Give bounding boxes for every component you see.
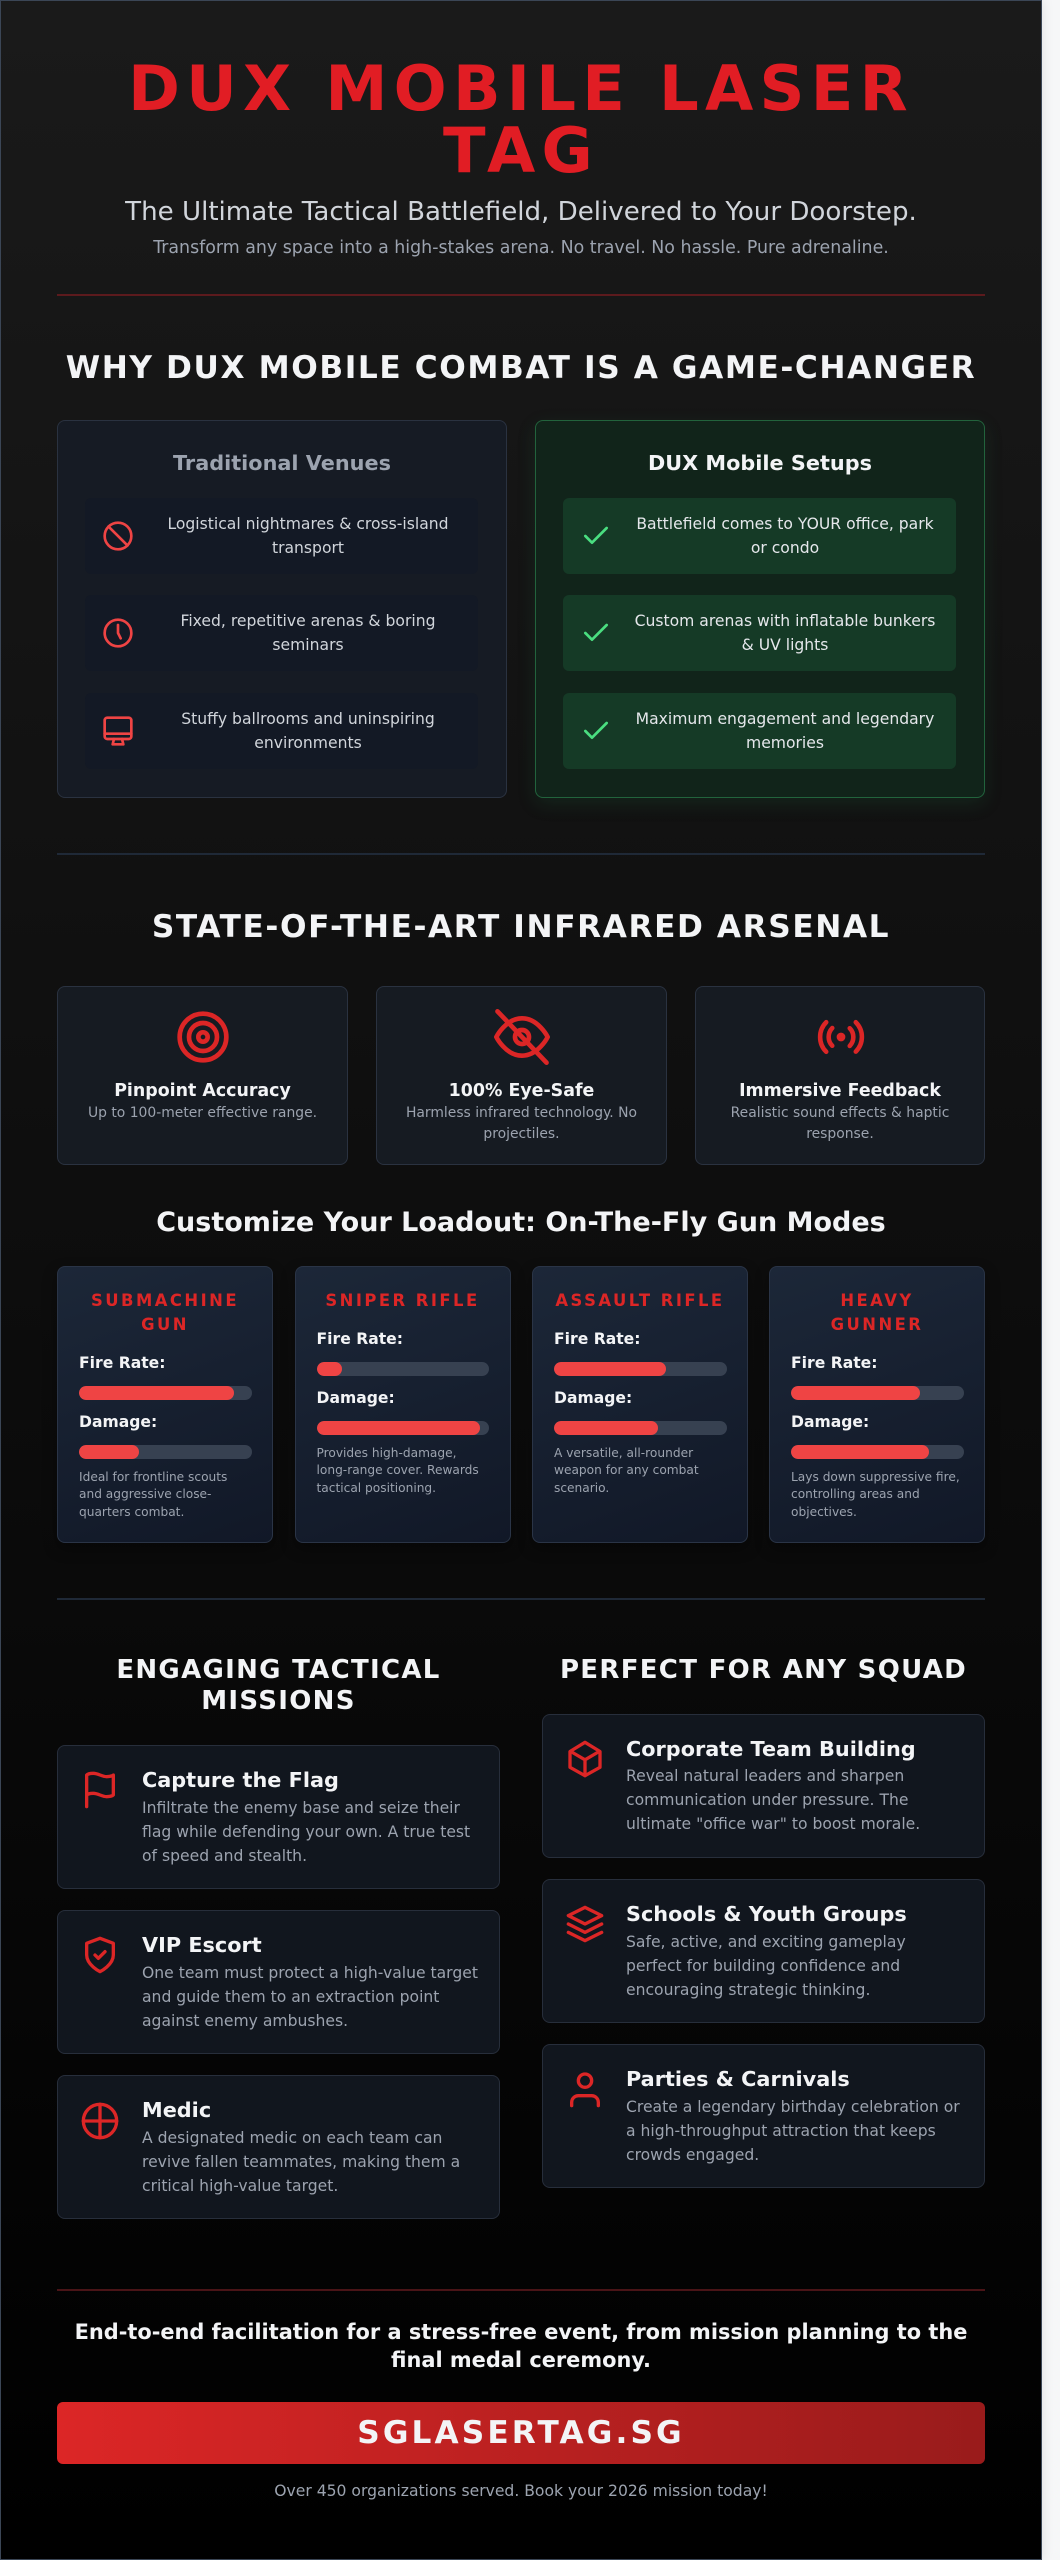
feature card: pinpoint accuracy [57,986,348,1165]
gun card: assault rifle: Damage: [554,1389,632,1407]
bar: fire rate 75% [791,1386,964,1400]
item: battlefield comes to you [563,498,956,574]
gun card: sniper rifle: Fire Rate: [316,1330,403,1348]
audience card: corporate team building: Reveal natural leaders and sharpen [626,1767,904,1785]
gun card: submachine gun: and aggressive close- [79,1487,211,1501]
heading: arsenal: STATE-OF-THE-ART INFRARED ARSENAL [152,909,890,945]
mission card: medic: revive fallen teammates, making them a [142,2153,460,2171]
item: stuffy ballrooms: Stuffy ballrooms and uninspiring [181,710,435,728]
audience card: parties and carnivals [542,2044,985,2188]
item: custom arenas: & UV lights [742,636,828,654]
icon: check [584,624,608,642]
gun card: heavy gunner: GUNNER [831,1315,923,1334]
feature card: eye-safe [376,986,666,1165]
subtitle: The Ultimate Tactical Battlefield, Delivered to Your Doorstep. [125,197,917,227]
feature card: eye-safe: projectiles. [483,1126,560,1142]
footer note: Over 450 organizations served. Book your 2026 mission today! [274,2482,768,2500]
bar: damage 35% [79,1445,252,1459]
audience card: schools and youth: Safe, active, and exciting gameplay [626,1932,906,1950]
audience card: schools and youth [542,1879,985,2023]
gun card: assault rifle: A versatile, all-rounder [554,1446,693,1460]
title: DUX MOBILE LASER [128,52,914,125]
gun card: submachine gun: Damage: [79,1413,157,1431]
audience card: parties and carnivals: Parties & Carnivals [626,2067,850,2091]
icon: broadcast waves [818,1020,864,1054]
feature card: immersive feedback: Immersive Feedback [739,1081,941,1101]
gun card: submachine gun: Fire Rate: [79,1354,166,1372]
icon: flag [85,1772,115,1808]
icon: layers [566,1906,604,1942]
gun card: submachine gun [57,1266,273,1543]
gun card: heavy gunner: HEAVY [840,1291,914,1310]
gun card: heavy gunner: Damage: [791,1413,869,1431]
item: battlefield comes to you: Battlefield comes to YOUR office, park [636,514,934,532]
heading: tactical missions [116,1655,441,1716]
closing statement [75,2320,967,2372]
mission card: VIP escort: VIP Escort [142,1933,262,1957]
item: stuffy ballrooms: environments [254,734,362,752]
mission card: VIP escort [57,1910,500,2054]
item: logistics: transport [272,539,344,557]
item: stuffy ballrooms [85,693,478,769]
feature card: immersive feedback: Realistic sound effects & haptic [731,1104,949,1120]
audience card: parties and carnivals: Create a legendary birthday celebration or [626,2098,960,2116]
audience card: schools and youth: perfect for building confidence and [626,1957,900,1975]
panel heading: traditional venues: Traditional Venues [173,451,391,475]
mission card: medic: A designated medic on each team can [142,2128,442,2146]
call to action button [57,2402,985,2464]
bar: damage 80% [791,1445,964,1459]
audience card: schools and youth: encouraging strategic thinking. [626,1981,870,1999]
item: maximum engagement [563,693,956,769]
item: logistics: Logistical nightmares & cross-island [167,514,449,532]
gun card: sniper rifle: Damage: [316,1389,395,1407]
mission card: VIP escort: and guide them to an extraction point [142,1988,439,2006]
mission card: capture the flag [57,1745,500,1889]
heading: tactical missions: ENGAGING TACTICAL [116,1655,441,1685]
gun card: submachine gun: Ideal for frontline scouts [79,1470,227,1484]
item: maximum engagement: Maximum engagement and legendary [636,710,934,728]
feature card: eye-safe: Harmless infrared technology. No [406,1104,637,1120]
gun card: sniper rifle [294,1266,510,1543]
item: maximum engagement: memories [746,734,824,752]
gun card: submachine gun: quarters combat. [79,1505,184,1519]
gun card: sniper rifle: Provides high-damage, [316,1446,457,1460]
audience card: parties and carnivals: crowds engaged. [626,2146,759,2164]
bar: fire rate 90% [79,1386,252,1400]
closing statement: End-to-end facilitation for a stress-free event, from mission planning to the [75,2320,967,2344]
heading: perfect for any squad: PERFECT FOR ANY SQUAD [560,1655,967,1685]
icon: circle plus [82,2102,118,2140]
item: battlefield comes to you: or condo [751,539,819,557]
feature card: immersive feedback [694,986,985,1165]
item: logistics [85,498,478,574]
heading: tactical missions: MISSIONS [201,1686,356,1716]
item: repetitive arenas: seminars [272,636,344,654]
gun card: heavy gunner: Fire Rate: [791,1354,878,1372]
title: TAG [443,114,599,187]
title [128,52,914,187]
item: repetitive arenas [85,595,478,671]
mission card: capture the flag: Infiltrate the enemy base and seize their [142,1798,460,1816]
feature card: immersive feedback: response. [806,1126,874,1142]
icon: target [177,1011,229,1063]
icon: monitor [103,716,133,746]
gun card: sniper rifle: tactical positioning. [316,1481,436,1495]
gun card: assault rifle: ASSAULT RIFLE [555,1291,725,1310]
bar: damage 60% [554,1421,726,1435]
panel: traditional venues [57,420,507,798]
gun card: heavy gunner: controlling areas and [791,1487,920,1501]
mission card: medic: critical high-value target. [142,2177,338,2195]
icon: clock [103,618,133,648]
gun card: assault rifle [532,1266,748,1543]
bar: damage 95% [316,1421,489,1435]
mission card: VIP escort: against enemy ambushes. [142,2012,348,2030]
panel: DUX mobile setups [535,420,985,798]
audience card: corporate team building: communication under pressure. The [626,1791,908,1809]
icon: person [570,2072,600,2108]
heading: why game-changer: WHY DUX MOBILE COMBAT IS A GAME-CHANGER [66,350,976,386]
audience card: corporate team building: Corporate Team Building [626,1736,916,1760]
gun card: submachine gun: GUN [141,1315,189,1334]
closing statement: final medal ceremony. [391,2348,651,2372]
gun card: assault rifle: Fire Rate: [554,1330,640,1348]
audience card: parties and carnivals: a high-throughput attraction that keeps [626,2122,936,2140]
icon: shield check [85,1936,115,1974]
gun card: heavy gunner: Lays down suppressive fire, [791,1470,960,1484]
audience card: schools and youth: Schools & Youth Groups [626,1902,907,1926]
mission card: medic: Medic [142,2098,211,2122]
audience card: corporate team building [542,1714,985,1858]
mission card: capture the flag: flag while defending your own. A true test [142,1823,470,1841]
icon: check [584,526,608,544]
mission card: capture the flag: of speed and stealth. [142,1847,307,1865]
call to action button: SGLASERTAG.SG [357,2415,685,2451]
icon: crossed-out eye [494,1009,550,1065]
bar: fire rate 65% [554,1362,726,1376]
audience card: corporate team building: ultimate "office war" to boost morale. [626,1815,920,1833]
gun card: submachine gun: SUBMACHINE [91,1291,239,1310]
item: custom arenas [563,595,956,671]
tagline: Transform any space into a high-stakes arena. No travel. No hassle. Pure adrenaline. [153,238,889,258]
gun card: heavy gunner: objectives. [791,1505,857,1519]
icon: ban [103,521,133,551]
gun card: sniper rifle: long-range cover. Rewards [316,1463,479,1477]
icon: check [584,722,608,740]
heading: loadout: Customize Your Loadout: On-The-Fly Gun Modes [156,1207,886,1238]
mission card: medic [57,2075,500,2219]
item: repetitive arenas: Fixed, repetitive arenas & boring [181,612,435,630]
feature card: pinpoint accuracy: Pinpoint Accuracy [114,1081,291,1101]
mission card: capture the flag: Capture the Flag [142,1768,339,1792]
gun card: sniper rifle: SNIPER RIFLE [325,1291,480,1310]
bar: fire rate 15% [316,1362,489,1376]
panel heading: DUX setups: DUX Mobile Setups [648,451,872,475]
item: custom arenas: Custom arenas with inflatable bunkers [635,612,935,630]
gun card: assault rifle: scenario. [554,1481,609,1495]
icon: cube [568,1740,602,1778]
gun card: heavy gunner [769,1266,985,1543]
gun card: assault rifle: weapon for any combat [554,1463,699,1477]
mission card: VIP escort: One team must protect a high-value target [142,1964,478,1982]
feature card: pinpoint accuracy: Up to 100-meter effective range. [88,1104,317,1120]
feature card: eye-safe: 100% Eye-Safe [449,1081,594,1101]
